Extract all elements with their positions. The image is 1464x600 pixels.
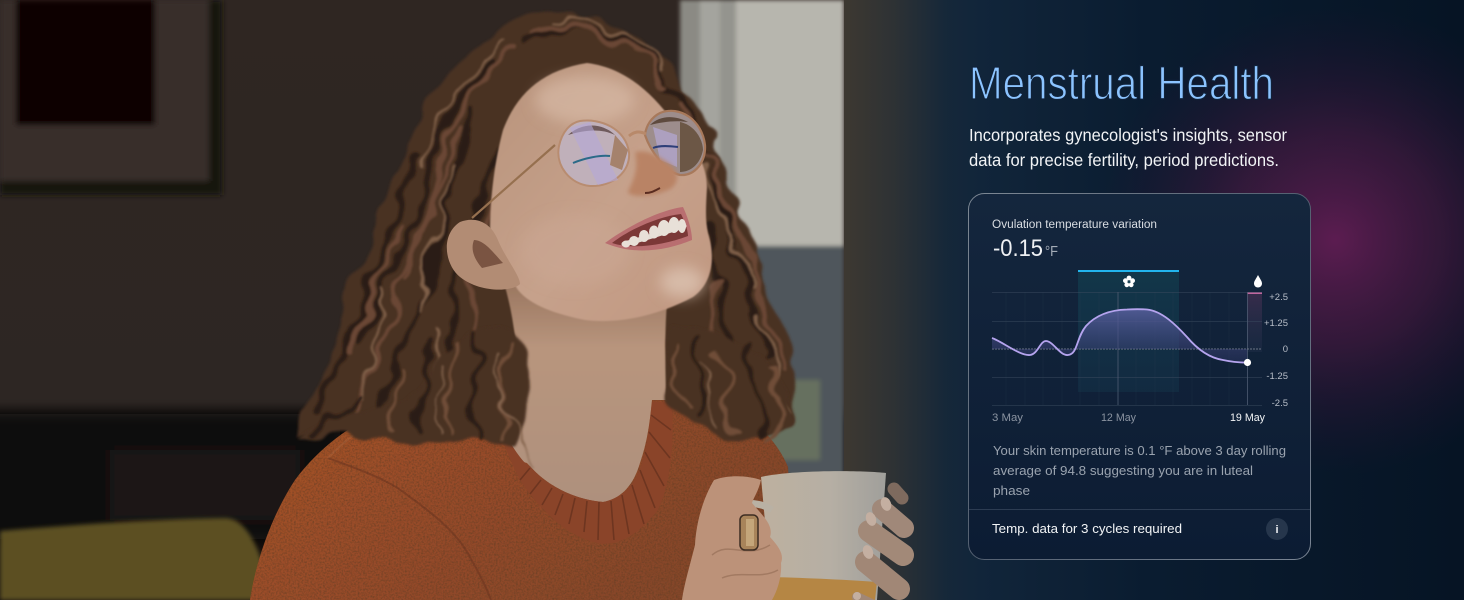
description text: Incorporates gynecologist's insights, sensor: [969, 125, 1287, 145]
icon: info button: [1266, 518, 1288, 540]
description text: data for precise fertility, period predictions.: [969, 150, 1279, 170]
ear: [447, 220, 520, 290]
photo: woman: [250, 13, 904, 600]
y axis labels: +1.25: [1264, 318, 1288, 329]
y axis labels: +2.5: [1269, 292, 1288, 303]
curve area: [992, 309, 1247, 363]
y axis labels: -2.5: [1272, 398, 1288, 409]
sweater: [250, 400, 795, 600]
icon: info button: i: [1275, 524, 1279, 536]
face: [490, 63, 712, 321]
title: Menstrual Health: [969, 57, 1274, 109]
hair front lower locks: [300, 328, 791, 448]
chart: ovulation temperature: [992, 270, 1288, 424]
footer note: Temp. data for 3 cycles required: [992, 521, 1182, 536]
dark furniture band: [0, 414, 340, 539]
picture frame on wall: [0, 0, 222, 195]
y axis labels: [1264, 292, 1288, 409]
smile: [605, 207, 692, 250]
sweater collar ribs: [328, 402, 673, 600]
temperature curve: [992, 309, 1247, 363]
period column: [1247, 292, 1262, 352]
window: [680, 0, 844, 476]
explanation text: Your skin temperature is 0.1 °F above 3 day rolling: [993, 443, 1286, 458]
hair curls back layer: [320, 22, 785, 430]
glasses: [472, 111, 705, 218]
explanation text: average of 94.8 suggesting you are in luteal: [993, 463, 1253, 478]
x axis labels: 19 May: [1230, 412, 1265, 424]
panel: temperature card: [968, 194, 1310, 560]
neck: [500, 270, 668, 530]
x axis labels: [992, 412, 1265, 424]
icon: flower: [1123, 276, 1135, 287]
temperature value: °F: [1045, 243, 1058, 260]
explanation text: phase: [993, 483, 1030, 498]
hair curls front layer: [312, 330, 779, 468]
background: navy gradient panel with pink glow: [845, 0, 1464, 600]
wall right of window: [844, 0, 984, 600]
left hand with ring: [682, 476, 782, 600]
y axis labels: 0: [1283, 344, 1288, 355]
explanation text: [993, 443, 1286, 498]
yellow chair: [0, 518, 266, 600]
temperature value: -0.15: [993, 235, 1043, 262]
mug: [716, 471, 886, 600]
y axis labels: -1.25: [1266, 371, 1288, 382]
x axis labels: 3 May: [992, 412, 1024, 424]
description text: [969, 125, 1287, 170]
face highlights: [520, 76, 704, 297]
nose: [628, 152, 677, 196]
fertile window band: [1078, 270, 1179, 392]
current value dot: [1244, 359, 1251, 366]
card heading: Ovulation temperature variation: [992, 219, 1157, 231]
x axis labels: 12 May: [1101, 412, 1136, 424]
icon: blood drop: [1254, 275, 1262, 288]
hair back mass: [300, 13, 796, 446]
right hand fingers: [853, 489, 904, 600]
